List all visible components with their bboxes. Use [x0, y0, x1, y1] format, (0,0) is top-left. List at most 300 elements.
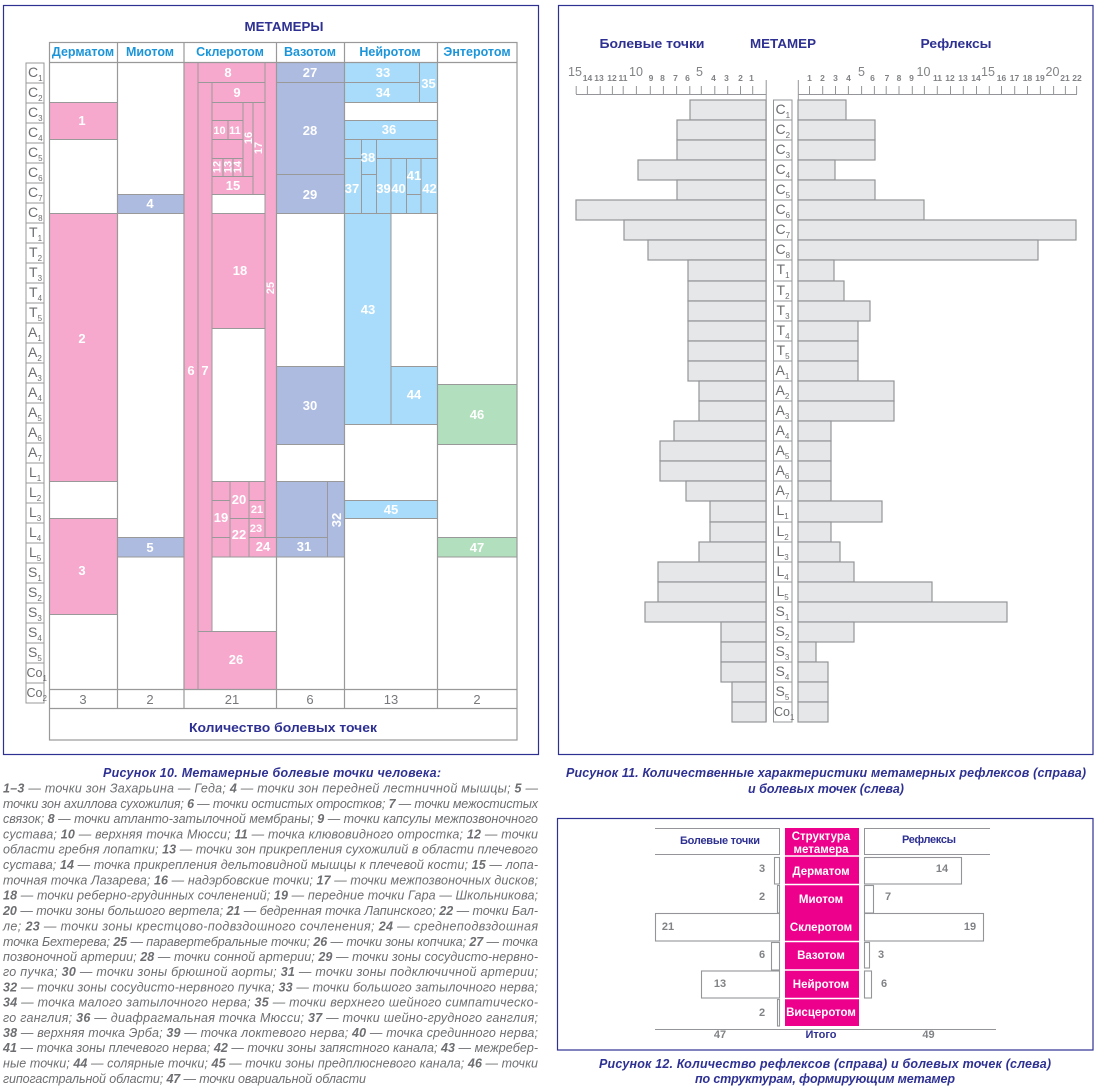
axis scale: 22: [1072, 73, 1082, 83]
metamer labels: left scale: 1: [37, 334, 42, 343]
text block: figure 10 legend: области гребня лопатки; 13 — точки зон прикрепления сухожилий в области плечевого: [3, 843, 538, 857]
axis scale: 16: [997, 73, 1006, 83]
axis scale: 14: [971, 73, 981, 83]
table grid: [50, 42, 517, 740]
point numbers: 5: [146, 540, 154, 555]
text block: figure 10 legend: го ганглия; 36 — диафрагмальная точка Мюсси; 37 — точки шейно-грудного ганглия;: [3, 1011, 539, 1025]
axis scale: 20: [1046, 65, 1059, 79]
point numbers: 25: [265, 282, 277, 294]
point numbers: 36: [382, 122, 396, 137]
metamer labels: left scale: L: [29, 464, 37, 480]
metamer labels: centre column: 2: [785, 292, 790, 301]
column: enterotome cells: [438, 384, 517, 557]
metamer labels: centre column: 3: [784, 553, 789, 562]
metamer labels: left scale: 5: [37, 414, 42, 423]
column headers: Миотом: [126, 45, 174, 59]
chart: structure bars: [655, 828, 996, 1041]
metamer labels: centre column: 7: [785, 492, 790, 501]
text block: figure 10 legend: 20 — точки зоны большого вертела; 21 — бедренная точка Лапинского; 22 — точки Бал-: [2, 904, 538, 918]
count of pain points row: 21: [225, 692, 239, 707]
axis scale: 9: [649, 73, 654, 83]
point numbers: 39: [376, 181, 391, 196]
text block: figure 10 legend: связок; 8 — точки атланто-затылочной мембраны; 9 — точки капсулы межпозвоночного: [3, 812, 538, 826]
metamer labels: centre column: T: [776, 342, 785, 358]
point numbers: 16: [243, 132, 255, 144]
axis scale: 19: [1035, 73, 1045, 83]
metamer labels: left scale: T: [29, 264, 38, 280]
point numbers: 18: [233, 263, 247, 278]
axis scale: 5: [696, 65, 703, 79]
bars: pain points by structure: [656, 858, 780, 1026]
metamer labels: centre column: C: [776, 141, 786, 157]
metamer labels: left scale: A: [28, 424, 37, 440]
axis scale: 1: [807, 73, 812, 83]
magenta structure column: Структура: [792, 831, 851, 843]
panel: figure 11 frame: [558, 6, 1093, 754]
metamer labels: centre column: S: [776, 643, 785, 659]
column headers: Склеротом: [196, 45, 264, 59]
axis scale: 12: [945, 73, 955, 83]
axis scale: 7: [885, 73, 890, 83]
metamer labels: centre column: S: [776, 663, 785, 679]
metamer labels: centre column: 3: [785, 653, 790, 662]
metamer labels: left scale: C: [28, 104, 38, 120]
axis scale: 18: [1023, 73, 1032, 83]
metamer labels: left scale: C: [28, 64, 38, 80]
point numbers: 47: [470, 540, 484, 555]
point numbers: 45: [384, 502, 398, 517]
metamer labels: centre column: 1: [790, 713, 795, 722]
count of pain points row: 6: [306, 692, 314, 707]
axis scale: [568, 65, 1082, 722]
metamer labels: centre column: A: [776, 402, 785, 418]
metamer labels: left scale: 2: [38, 254, 43, 263]
text block: figure 10 legend: 38 — верхняя точка Эрба; 39 — точка локтевого нерва; 40 — точка срединного нерва;: [3, 1026, 539, 1040]
metamer labels: left scale: 7: [37, 454, 42, 463]
bar values: 3: [878, 949, 884, 961]
text block: figure 10 legend: го пучка; 30 — точки зоны брюшной аорты; 31 — точки зоны подключичной артерии;: [3, 965, 539, 979]
point numbers: 33: [376, 65, 390, 80]
magenta structure column: Дерматом: [792, 866, 850, 878]
caption: figure 11: Рисунок 11. Количественные характеристики метамерных рефлексов (справа): [566, 766, 1086, 780]
metamer labels: left scale: S: [28, 604, 37, 620]
metamer labels: left scale: 3: [37, 514, 42, 523]
metamer labels: left scale: 4: [37, 534, 42, 543]
point numbers: 10: [213, 125, 226, 137]
axis scale: 7: [673, 73, 678, 83]
metamer labels: left scale: 6: [37, 434, 42, 443]
metamer labels: left scale: A: [28, 364, 37, 380]
axis scale: 15: [981, 65, 995, 79]
point numbers: 26: [229, 652, 243, 667]
metamer labels: centre column: 5: [784, 593, 789, 602]
bar values: 6: [881, 978, 887, 990]
text block: figure 10 legend: гипогастральной области; 47 — точки овариальной области: [3, 1072, 366, 1086]
point numbers: 2: [78, 331, 86, 346]
metamer labels: left scale: S: [28, 624, 37, 640]
metamer labels: left scale: 5: [37, 554, 42, 563]
metamer labels: centre column: 5: [785, 693, 790, 702]
metamer labels: centre column: C: [776, 181, 786, 197]
caption: figure 12: по структурам, формирующим метамер: [695, 1072, 955, 1086]
metamer labels: left scale: C: [28, 204, 38, 220]
metamer labels: centre column: C: [776, 121, 786, 137]
metamer labels: centre column: 3: [785, 412, 790, 421]
metamer labels: centre column: 1: [784, 512, 789, 521]
metamer labels: centre column: Co: [774, 705, 790, 719]
text block: figure 10 legend: 34 — точка малого затылочного нерва; 35 — точки верхнего шейного симпатическо-: [3, 996, 538, 1010]
metamer labels: left scale: C: [28, 144, 38, 160]
bar values: 13: [714, 978, 726, 990]
metamer labels: centre column: C: [776, 161, 786, 177]
metamer labels: left scale: L: [29, 524, 37, 540]
heading: metamer: МЕТАМЕР: [750, 36, 816, 51]
column headers: Вазотом: [284, 45, 336, 59]
point numbers: 21: [251, 504, 263, 516]
metamer labels: left scale: C: [28, 184, 38, 200]
bar values: 6: [759, 949, 765, 961]
metamer labels: centre column: A: [776, 382, 785, 398]
axis scale: 14: [583, 73, 592, 83]
axis scale: 4: [711, 73, 716, 83]
magenta structure column: Склеротом: [790, 922, 852, 934]
point numbers: 7: [201, 363, 209, 378]
panel: figure 12 frame: [558, 818, 1093, 1050]
point numbers: 44: [407, 387, 422, 402]
metamer labels: left scale: T: [29, 284, 38, 300]
metamer labels: centre column: C: [776, 101, 786, 117]
totals row: 49: [922, 1029, 935, 1041]
point numbers: 9: [233, 85, 241, 100]
metamer labels: left scale: A: [28, 404, 37, 420]
caption: figure 11: [566, 766, 1086, 796]
axis scale: 8: [897, 73, 902, 83]
column headers: [52, 45, 511, 59]
metamer labels: centre column: L: [776, 543, 784, 559]
point numbers: 15: [226, 178, 240, 193]
column: neurotome cells: [344, 62, 438, 518]
text block: figure 10 legend: точки зон ахиллова сухожилия; 6 — точки остистых отростков; 7 — точки межостистых: [3, 797, 539, 811]
metamer labels: centre column: A: [776, 442, 785, 458]
axis scale: 13: [594, 73, 604, 83]
metamer labels: centre column: 1: [785, 613, 790, 622]
metamer labels: left scale: 5: [38, 314, 43, 323]
text block: figure 10 legend: [2, 782, 539, 1086]
point numbers: 24: [256, 539, 271, 554]
metamer labels: centre column: A: [776, 362, 785, 378]
point numbers: 20: [232, 492, 246, 507]
metamer labels: left scale: 3: [37, 374, 42, 383]
axis scale: 2: [820, 73, 825, 83]
bar values: 19: [964, 921, 976, 933]
point numbers: 29: [303, 187, 317, 202]
metamer labels: left scale: 1: [38, 74, 43, 83]
caption: figure 11: и болевых точек (слева): [748, 782, 904, 796]
axis scale: 6: [870, 73, 875, 83]
metamer labels: left scale: 8: [38, 214, 43, 223]
magenta structure column: Миотом: [799, 894, 843, 906]
metamer labels: centre column: S: [776, 623, 785, 639]
metamer labels: left scale: 1: [37, 474, 42, 483]
point numbers: 35: [421, 76, 436, 91]
metamer labels: centre column: [774, 100, 795, 722]
axis scale: 9: [909, 73, 914, 83]
metamer labels: centre column: 6: [786, 211, 791, 220]
metamer labels: left scale: S: [28, 584, 37, 600]
metamer labels: left scale: 3: [38, 274, 43, 283]
point numbers: 34: [376, 85, 391, 100]
point numbers: 17: [253, 142, 265, 154]
table footer label: Количество болевых точек: [189, 720, 378, 735]
metamer labels: left scale: C: [28, 124, 38, 140]
count of pain points row: 2: [146, 692, 154, 707]
metamer labels: centre column: 4: [786, 171, 791, 180]
bar values: 2: [759, 891, 765, 903]
metamer labels: left scale: C: [28, 164, 38, 180]
count of pain points row: 3: [79, 692, 87, 707]
point numbers: 42: [422, 181, 437, 196]
totals row: Итого: [805, 1029, 837, 1041]
axis scale: 13: [958, 73, 968, 83]
axis scale: 5: [858, 65, 865, 79]
metamer labels: left scale: 2: [38, 94, 43, 103]
magenta structure column: метамера: [793, 844, 849, 856]
point numbers: 3: [78, 563, 86, 578]
point numbers: 12: [212, 161, 224, 173]
metamer labels: centre column: C: [776, 241, 786, 257]
metamer labels: centre column: C: [776, 221, 786, 237]
text block: figure 10 legend: точка Бехтерева; 25 — паравертебральные точки; 26 — точки зоны копчика; 27 — точка: [3, 935, 538, 949]
panel: figure 10 frame: [4, 6, 538, 754]
point numbers: 27: [303, 65, 317, 80]
count of pain points row: 2: [473, 692, 481, 707]
metamer labels: left scale: 5: [37, 654, 42, 663]
axis scale: 21: [1060, 73, 1070, 83]
metamer labels: left scale: 1: [42, 674, 47, 683]
axis scale: 4: [846, 73, 851, 83]
column: sclerotome cells: [184, 62, 276, 690]
metamer labels: left scale: 2: [37, 494, 42, 503]
metamer labels: left scale: A: [28, 344, 37, 360]
bar values: [662, 863, 976, 1019]
point numbers: 6: [187, 363, 195, 378]
metamer labels: left scale: S: [28, 644, 37, 660]
metamer labels: centre column: 4: [785, 332, 790, 341]
metamer labels: centre column: T: [776, 282, 785, 298]
metamer labels: centre column: T: [776, 261, 785, 277]
metamer labels: left scale: 4: [37, 634, 42, 643]
point numbers: 41: [407, 168, 421, 183]
totals row: [655, 1029, 996, 1041]
bars: pain points (left): [576, 100, 766, 722]
axis scale: 11: [933, 73, 942, 83]
metamer labels: centre column: A: [776, 482, 785, 498]
caption: figure 12: [599, 1057, 1051, 1086]
metamer labels: centre column: S: [776, 603, 785, 619]
metamer labels: centre column: 1: [786, 111, 791, 120]
table: metamer structure: [50, 42, 517, 740]
metamer labels: centre column: 3: [785, 312, 790, 321]
axis scale: 15: [568, 65, 582, 79]
caption: figure 12: Рисунок 12. Количество рефлексов (справа) и болевых точек (слева): [599, 1057, 1051, 1071]
metamer labels: left scale: 7: [38, 194, 43, 203]
point numbers: 22: [232, 527, 246, 542]
magenta structure column: Висцеротом: [786, 1007, 856, 1019]
bar values: 21: [662, 921, 674, 933]
axis scale: 2: [738, 73, 743, 83]
metamer labels: centre column: 7: [786, 231, 791, 240]
metamer labels: left scale: S: [28, 564, 37, 580]
point numbers: 40: [391, 181, 406, 196]
point numbers: 30: [303, 398, 317, 413]
metamer labels: centre column: 2: [786, 131, 791, 140]
bar values: 3: [759, 863, 765, 875]
axis scale: 1: [749, 73, 754, 83]
text block: figure 10 legend: позвоночной артерии; 28 — точки сонной артерии; 29 — точки зоны сосудисто-нервно-: [3, 950, 538, 964]
point numbers: 13: [222, 161, 234, 173]
axis scale: 12: [607, 73, 617, 83]
metamer labels: left scale: A: [28, 444, 37, 460]
axis scale: 3: [833, 73, 838, 83]
header: reflexes: Рефлексы: [902, 834, 956, 846]
metamer labels: left scale: 1: [37, 574, 42, 583]
bar values: 14: [936, 863, 949, 875]
metamer labels: left scale: Co: [26, 666, 42, 680]
column: dermatome cells: [50, 102, 118, 614]
point numbers: 38: [361, 150, 375, 165]
metamer labels: left scale: L: [29, 504, 37, 520]
magenta structure column: Вазотом: [797, 950, 845, 962]
point numbers: 11: [229, 125, 241, 137]
axis scale: 10: [629, 65, 643, 79]
bars: reflexes (right): [798, 100, 1076, 722]
point numbers: 14: [232, 160, 244, 173]
point numbers: 43: [361, 302, 375, 317]
metamer labels: left scale: [26, 63, 47, 703]
axis scale: 11: [618, 73, 628, 83]
metamer labels: left scale: L: [29, 484, 37, 500]
metamer labels: left scale: A: [28, 324, 37, 340]
metamer labels: centre column: 1: [785, 372, 790, 381]
metamer labels: left scale: 6: [38, 174, 43, 183]
metamer labels: centre column: L: [776, 583, 784, 599]
metamer labels: centre column: T: [776, 302, 785, 318]
metamer labels: left scale: 3: [38, 114, 43, 123]
metamer labels: left scale: 2: [37, 594, 42, 603]
text block: figure 10 legend: 1–3 — точки зон Захарьина — Геда; 4 — точки зон передней лестничной мышцы; 5 —: [3, 782, 538, 796]
point numbers: 4: [146, 196, 154, 211]
bars: reflexes by structure: [864, 858, 984, 998]
metamer labels: centre column: 2: [785, 392, 790, 401]
totals row: 47: [714, 1029, 726, 1041]
magenta structure column: Нейротом: [793, 979, 849, 991]
metamer labels: left scale: T: [29, 244, 38, 260]
caption: figure 10: Рисунок 10. Метамерные болевые точки человека:: [103, 766, 441, 780]
metamer labels: centre column: 4: [785, 432, 790, 441]
metamer labels: left scale: L: [29, 544, 37, 560]
header: pain points: Болевые точки: [680, 835, 760, 847]
point numbers: 8: [224, 65, 232, 80]
metamer labels: centre column: 5: [786, 191, 791, 200]
header: reflexes: [864, 828, 990, 854]
metamer labels: centre column: L: [776, 523, 784, 539]
axis scale: 8: [660, 73, 665, 83]
metamer labels: left scale: 3: [37, 614, 42, 623]
metamer labels: left scale: 2: [37, 354, 42, 363]
metamer labels: left scale: T: [29, 304, 38, 320]
axis scale: 10: [917, 65, 930, 79]
axis scale: 6: [685, 73, 690, 83]
metamer labels: centre column: L: [776, 563, 784, 579]
metamer labels: centre column: 4: [785, 673, 790, 682]
metamer labels: centre column: 3: [786, 151, 791, 160]
metamer labels: centre column: L: [776, 502, 784, 518]
metamer labels: centre column: 6: [785, 472, 790, 481]
point numbers: 28: [303, 123, 317, 138]
text block: figure 10 legend: 41 — точка зоны плечевого нерва; 42 — точки зоны запястного канала; 43 — межребер-: [2, 1041, 538, 1055]
column headers: Дерматом: [52, 45, 114, 59]
bar values: 2: [759, 1007, 765, 1019]
metamer labels: centre column: 2: [785, 633, 790, 642]
point numbers: 31: [297, 539, 311, 554]
metamer labels: left scale: 4: [37, 394, 42, 403]
axis scale: 17: [1010, 73, 1019, 83]
text block: figure 10 legend: сустава; 14 — точка прикрепления дельтовидной мышцы к плечевой кости; 15 — лопа-: [3, 858, 538, 872]
chart: double bar with scale: [568, 65, 1082, 722]
point numbers: 23: [250, 523, 262, 535]
metamer labels: left scale: 2: [42, 694, 47, 703]
metamer labels: left scale: 5: [38, 154, 43, 163]
column: myotome and vasotome cells: [118, 62, 344, 557]
axis scale: 3: [724, 73, 729, 83]
text block: figure 10 legend: 18 — точки реберно-грудинных сочленений; 19 — передние точки Гара — Школьникова;: [3, 889, 539, 903]
metamer labels: left scale: 1: [38, 234, 43, 243]
metamer labels: centre column: 2: [784, 533, 789, 542]
bar values: 7: [885, 891, 891, 903]
metamer labels: left scale: 4: [38, 294, 43, 303]
metamer labels: left scale: C: [28, 84, 38, 100]
count of pain points row: 13: [384, 692, 398, 707]
point numbers: 46: [470, 407, 484, 422]
point numbers: 19: [214, 510, 228, 525]
point numbers: 37: [345, 181, 359, 196]
header: pain points: [655, 828, 780, 854]
point numbers: [78, 65, 484, 667]
heading: metamers: МЕТАМЕРЫ: [244, 19, 324, 34]
text block: figure 10 legend: сустава; 10 — верхняя точка Мюсси; 11 — точка клювовидного отростка; 12 — точки: [3, 827, 538, 841]
metamer labels: centre column: A: [776, 422, 785, 438]
text block: figure 10 legend: ле; 23 — точки зоны крестцово-подвздошного сочленения; 24 — среднеподвздошная: [2, 920, 538, 934]
text block: figure 10 legend: 32 — точки зоны сосудисто-нервного пучка; 33 — точки большого затылочного нерва;: [3, 980, 539, 994]
text block: figure 10 legend: ные точки; 44 — солярные точки; 45 — точки зоны предплюсневого канала; 46 — точки: [3, 1056, 538, 1070]
point numbers: 1: [78, 113, 86, 128]
column headers: Нейротом: [359, 45, 421, 59]
metamer labels: centre column: T: [776, 322, 785, 338]
metamer labels: centre column: 5: [785, 452, 790, 461]
text block: figure 10 legend: точная точка Лазарева; 16 — надэрбовские точки; 17 — точки межпозвоночных дисков;: [3, 873, 539, 887]
metamer labels: centre column: 4: [784, 573, 789, 582]
metamer labels: centre column: 1: [785, 271, 790, 280]
point numbers: 32: [329, 513, 344, 527]
metamer labels: left scale: 4: [38, 134, 43, 143]
metamer labels: left scale: A: [28, 384, 37, 400]
column headers: Энтеротом: [443, 45, 511, 59]
count of pain points row: [79, 692, 481, 707]
metamer labels: centre column: C: [776, 201, 786, 217]
metamer labels: centre column: 8: [786, 251, 791, 260]
metamer labels: centre column: A: [776, 462, 785, 478]
heading: reflexes: Рефлексы: [920, 36, 992, 51]
